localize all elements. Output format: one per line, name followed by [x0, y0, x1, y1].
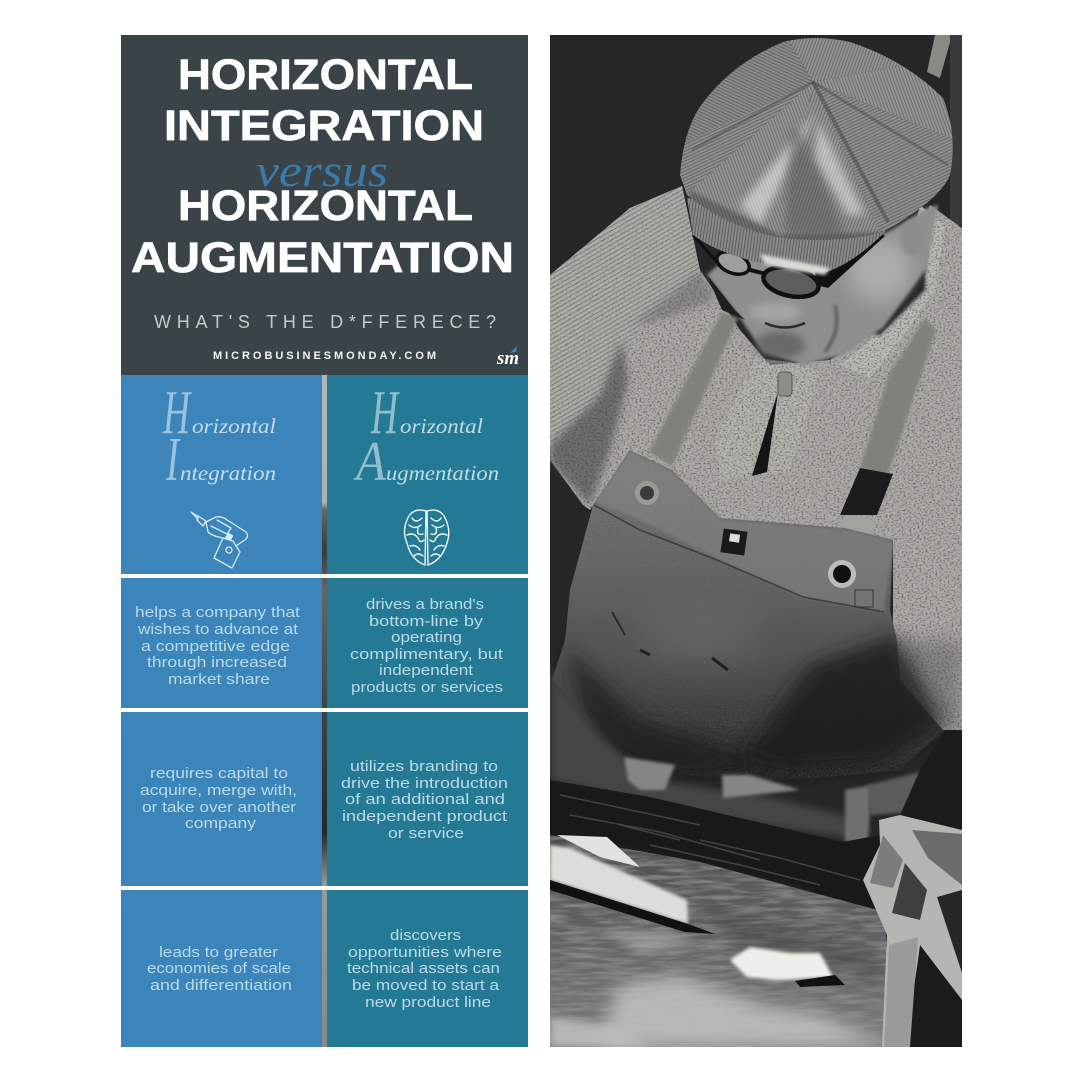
panel: row 1 right [327, 578, 528, 708]
text block: wishes to advance at [137, 621, 299, 638]
text block: drive the introduction [341, 775, 508, 792]
apron straps [649, 312, 936, 540]
panel: augmentation column header [327, 375, 528, 574]
text block: and differentiation [150, 977, 292, 994]
heading line: Augmentation: AUGMENTATION [131, 234, 514, 282]
text block: helps a company that [135, 604, 301, 621]
text block: or service [388, 825, 464, 842]
plastic crate [863, 815, 962, 1047]
script label: Augmentation: A [352, 431, 387, 493]
text block: opportunities where [348, 944, 502, 961]
panel: photograph of craftsman in cap and apron [550, 30, 970, 1047]
text block: leads to greater [159, 944, 278, 961]
glasses [693, 233, 885, 302]
icon: drill [191, 512, 248, 568]
text block: products or services [351, 679, 503, 696]
panel: title header [121, 35, 528, 375]
text block: acquire, merge with, [140, 782, 297, 799]
panel: row 3 right [327, 890, 528, 1047]
script label: Horizontal: orizontal [400, 414, 483, 438]
sweater placket and zip [715, 358, 820, 480]
text block: technical assets can [347, 960, 500, 977]
text block: requires capital to [150, 765, 288, 782]
text block: discovers [390, 927, 461, 944]
script label: Horizontal: orizontal [192, 414, 276, 438]
text block: operating [391, 629, 462, 646]
photo strip visible between columns [322, 375, 327, 1047]
icon: brain [404, 510, 449, 565]
panel: integration column header [121, 375, 322, 574]
chalk and clay pieces [550, 835, 845, 987]
apron [552, 450, 945, 780]
collar [840, 205, 945, 378]
text block: utilizes branding to [350, 758, 498, 775]
text block: bottom-line by [369, 613, 484, 630]
heading line: Horizontal: HORIZONTAL [178, 51, 473, 99]
text block: a competitive edge [141, 638, 290, 655]
heading line: Integration: INTEGRATION [164, 102, 484, 150]
work table [550, 780, 890, 1047]
text block: company [185, 815, 257, 832]
panel: row 2 right [327, 712, 528, 886]
flat corduroy cap [680, 38, 953, 278]
subtitle: WHAT'S THE D*FFERECE? [154, 312, 496, 332]
logo: sm [496, 348, 519, 369]
text block: new product line [365, 994, 491, 1011]
panel: row 3 left [121, 890, 322, 1047]
cloth folds below apron [550, 670, 962, 842]
apron rivets and label [635, 481, 873, 607]
script label: Integration: ntegration [180, 461, 276, 485]
script word: versus: versus [256, 145, 388, 196]
face [707, 205, 938, 365]
text block: of an additional and [345, 791, 505, 808]
text block: complimentary, but [350, 646, 504, 663]
text block: through increased [147, 654, 287, 671]
website: MICROBUSINESMONDAY.COM [213, 350, 436, 362]
script label: Augmentation: ugmentation [386, 461, 499, 485]
heading line: Horizontal second: HORIZONTAL [178, 182, 473, 230]
text block: independent product [342, 808, 508, 825]
panel: row 1 left [121, 578, 322, 708]
text block: market share [168, 671, 270, 688]
text block: be moved to start a [352, 977, 500, 994]
script label: Horizontal: H [370, 379, 400, 447]
sweater [550, 186, 962, 730]
text block: economies of scale [147, 960, 291, 977]
script label: Integration: I [165, 426, 181, 494]
text block: drives a brand's [366, 596, 484, 613]
text block: independent [379, 662, 474, 679]
panel: row 2 left [121, 712, 322, 886]
script label: Horizontal: H [162, 379, 192, 447]
text block: or take over another [142, 799, 296, 816]
